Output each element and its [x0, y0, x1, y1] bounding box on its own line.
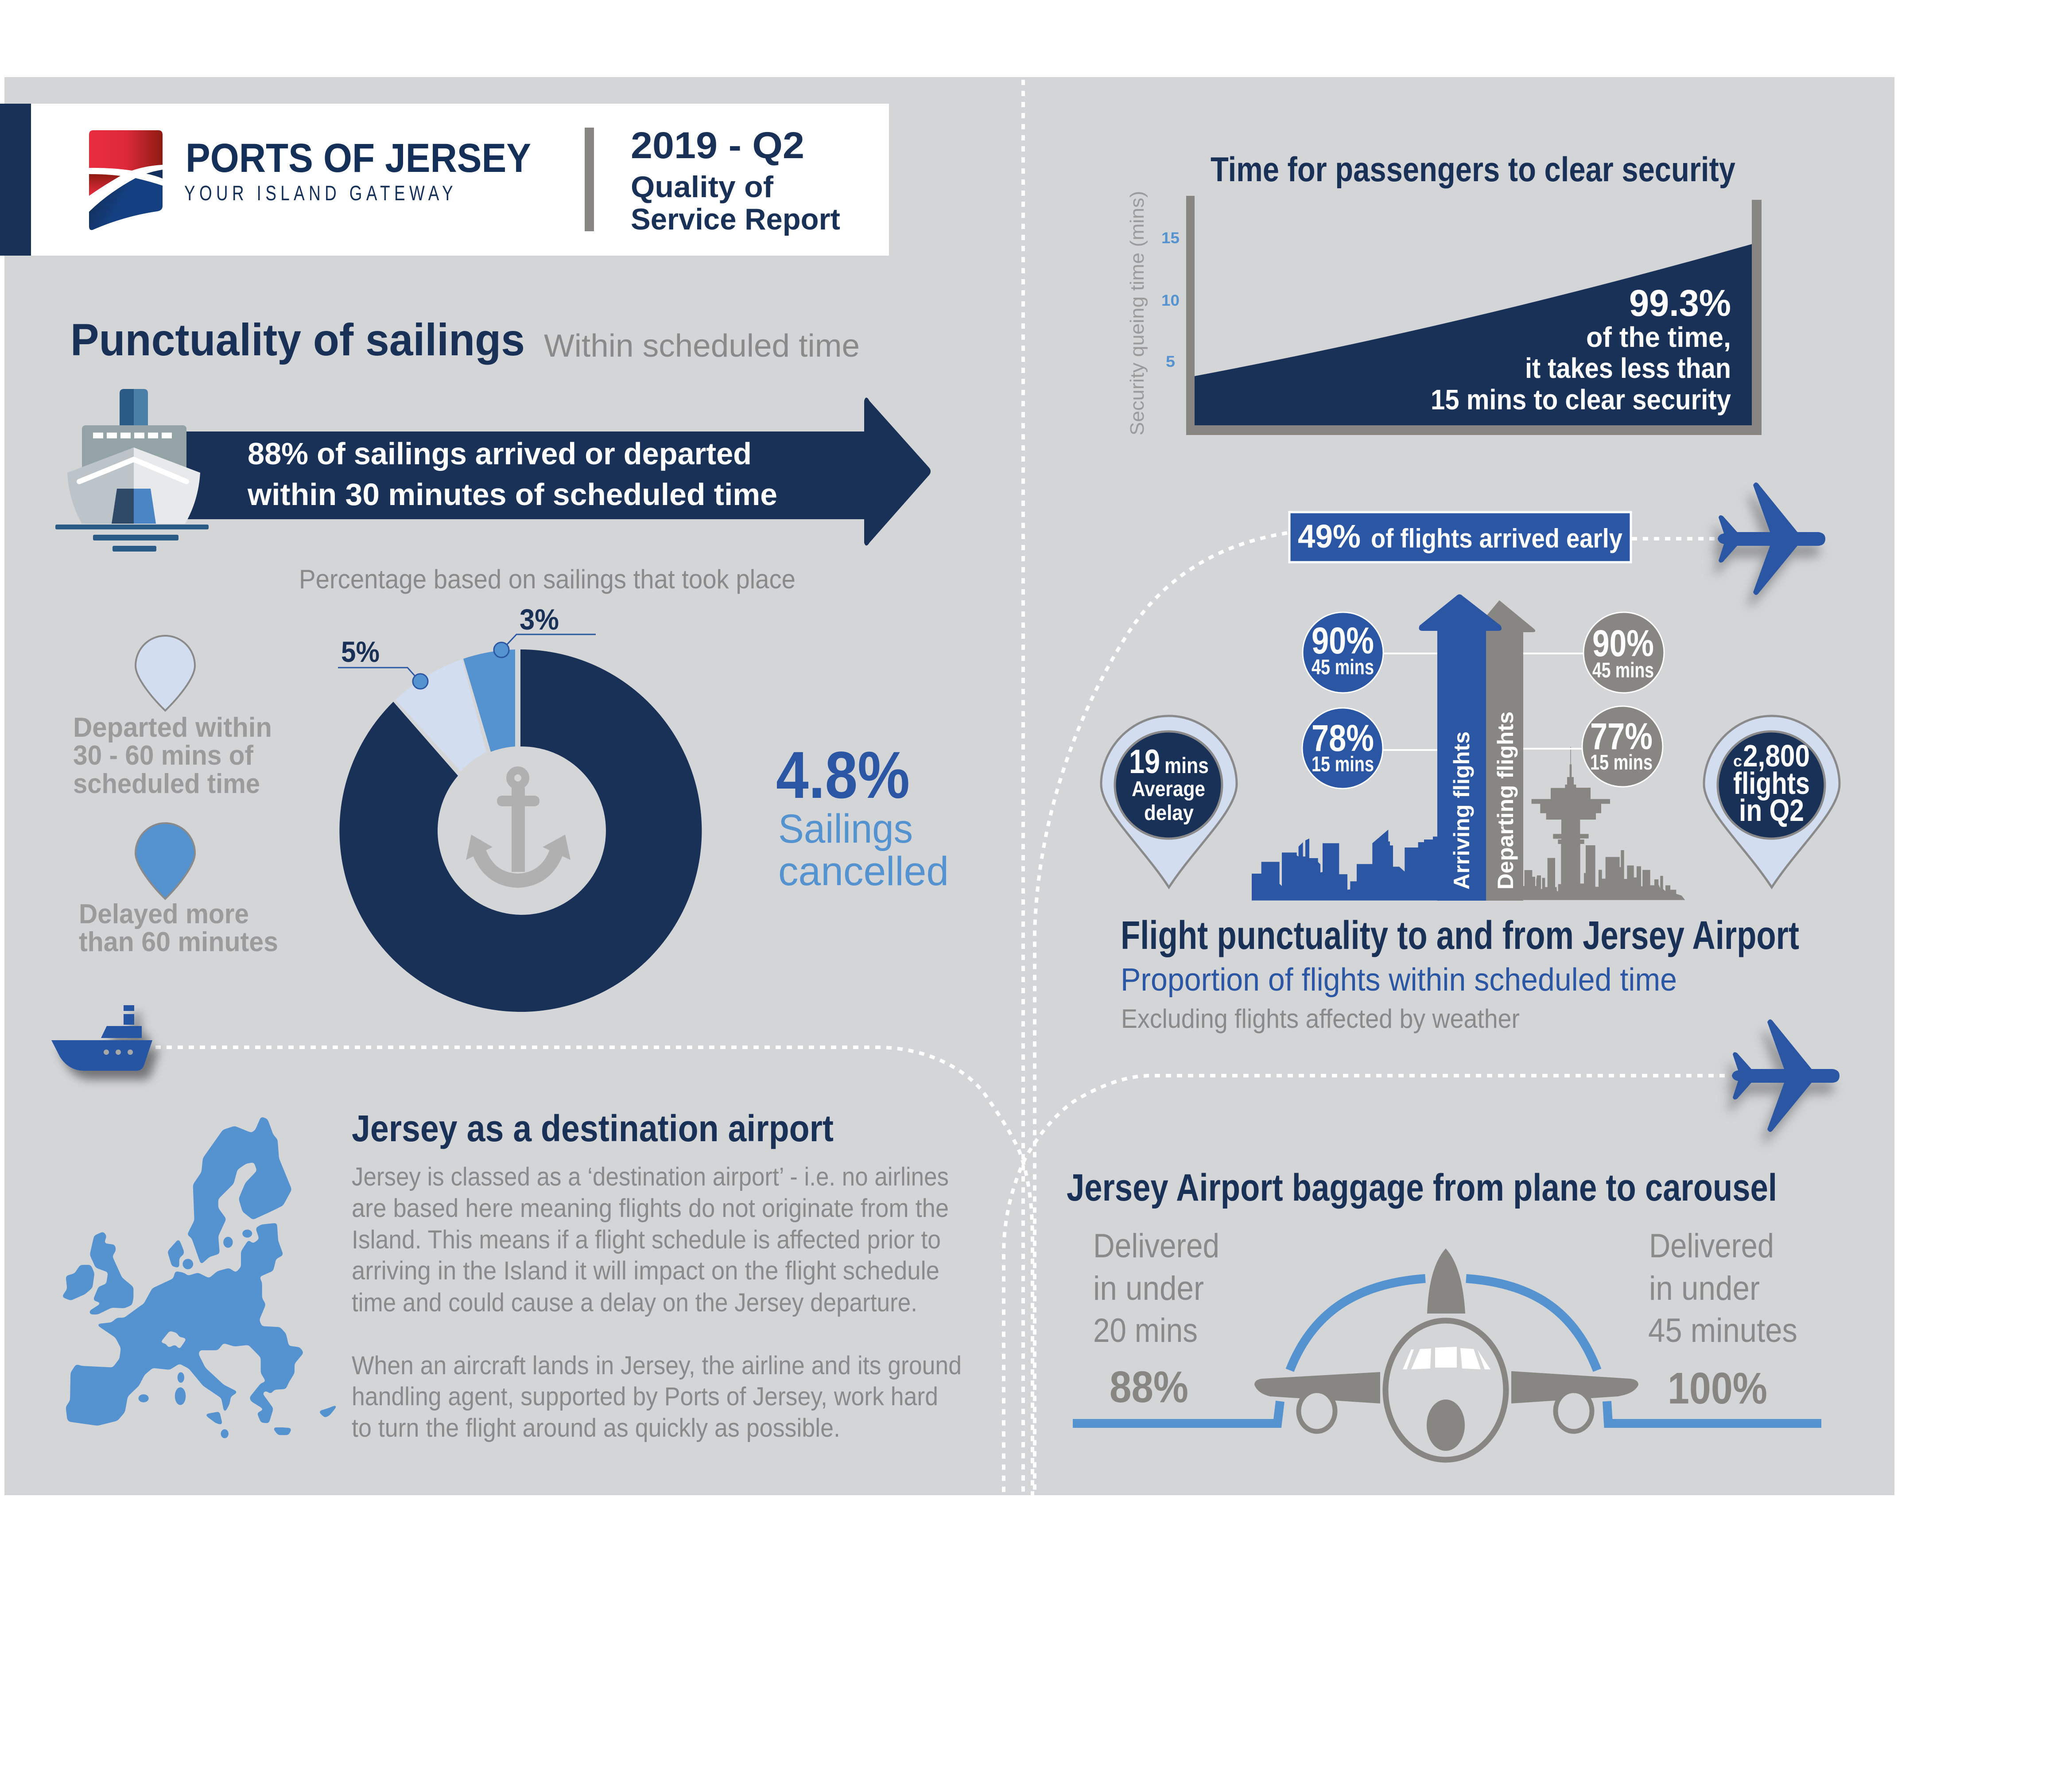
stat: 4.8% sailings cancelled: 4.8% — [776, 738, 910, 812]
heading: Jersey as a destination airport: Jersey as a destination airport — [352, 1108, 834, 1149]
y axis ticks — [1161, 229, 1180, 370]
text: delivered in under 45 minutes: 45 minutes — [1648, 1312, 1797, 1349]
skyline: departures and control tower — [1523, 747, 1685, 900]
report title: Quality of — [631, 170, 773, 204]
report title: Service Report — [631, 202, 840, 236]
bubble: departing 77% 15 mins: 15 mins — [1590, 751, 1653, 774]
skyline: arrivals — [1252, 830, 1437, 901]
donut chart: sailings — [338, 603, 702, 1012]
bubble: departing 77% 15 mins: 77% — [1590, 715, 1653, 757]
note: percentage basis: Percentage based on sailings that took place — [299, 564, 796, 594]
bubble: departing 77% 15 mins — [1523, 706, 1663, 787]
area chart: security queue time — [1126, 191, 1762, 435]
legend: departed within 30-60 mins: 30 - 60 mins of — [73, 740, 253, 771]
pin: c2,800 flights in Q2: 2,800 — [1743, 739, 1810, 773]
route line — [1073, 1279, 1821, 1423]
y axis ticks: 10 — [1161, 292, 1180, 309]
callout: 49% of flights arrived early: of flights arrived early — [1371, 524, 1623, 553]
text: delivered in under 45 minutes: Delivered — [1649, 1227, 1774, 1265]
text: delivered in under 20 mins: 20 mins — [1093, 1312, 1198, 1349]
bubble: arriving 78% 15 mins: 78% — [1312, 717, 1374, 759]
bubble: arriving 90% 45 mins: 45 mins — [1312, 656, 1374, 679]
icon: plane upper — [1718, 482, 1825, 595]
donut slice: on time — [339, 649, 702, 1012]
bubble: arriving 90% 45 mins — [1303, 612, 1437, 693]
pin: c2,800 flights in Q2 — [1704, 716, 1839, 887]
callout: 99.3% — [1431, 282, 1731, 416]
bubble: departing 90% 45 mins: 90% — [1592, 622, 1654, 664]
icon: ferry front view — [55, 389, 209, 552]
text block: destination airport: When an aircraft lands in Jersey, the airline and its ground — [352, 1351, 962, 1380]
pin: 19 mins average delay: 19 — [1129, 743, 1160, 781]
text block: destination airport: arriving in the Island it will impact on the flight schedule — [352, 1256, 939, 1285]
heading: punctuality of sailings: Punctuality of sailings — [70, 315, 525, 365]
report title — [631, 170, 840, 236]
text block: destination airport: Island. This means if a flight schedule is affected prior to — [352, 1225, 941, 1254]
pin: 19 mins average delay: delay — [1144, 801, 1194, 825]
icon: plane lower — [1732, 1019, 1839, 1132]
header band — [0, 104, 889, 256]
text block: destination airport: time and could cause a delay on the Jersey departure. — [352, 1288, 917, 1317]
bubble: departing 90% 45 mins: 45 mins — [1592, 659, 1654, 682]
note: excluding weather: Excluding flights affected by weather — [1121, 1004, 1520, 1034]
callout: 99.3%: 15 mins to clear security — [1431, 384, 1731, 416]
pin: c2,800 flights in Q2: in Q2 — [1739, 793, 1804, 828]
text block: destination airport: to turn the flight around as quickly as possible. — [352, 1414, 840, 1442]
icon: anchor — [466, 770, 570, 887]
callout: 49% of flights arrived early: 49% — [1298, 518, 1361, 555]
stat: 4.8% sailings cancelled — [776, 738, 949, 894]
pin: 19 mins average delay — [1101, 716, 1237, 887]
callout: 99.3%: 99.3% — [1629, 282, 1731, 324]
legend: delayed more than 60 mins — [79, 823, 278, 957]
callout: 99.3%: of the time, — [1586, 321, 1731, 353]
text block: destination airport: Jersey is classed as a ‘destination airport’ - i.e. no airlines — [352, 1162, 949, 1191]
pin: c2,800 flights in Q2: flights — [1733, 766, 1810, 801]
text block: destination airport: are based here meaning flights do not originate from the — [352, 1194, 949, 1223]
legend: departed within 30-60 mins: Departed within — [73, 712, 272, 743]
stat: 4.8% sailings cancelled: Sailings — [778, 806, 913, 851]
y axis ticks: 15 — [1161, 229, 1180, 247]
label: 5%: 5% — [341, 635, 380, 668]
subheading: proportion of flights: Proportion of flights within scheduled time — [1121, 962, 1677, 998]
pin: 19 mins average delay: mins — [1164, 753, 1209, 778]
text: delivered in under 45 minutes — [1648, 1227, 1797, 1349]
label: 3%: 3% — [520, 603, 559, 636]
heading: time to clear security: Time for passengers to clear security — [1211, 150, 1735, 189]
bubble: arriving 90% 45 mins: 90% — [1312, 620, 1374, 661]
heading: baggage: Jersey Airport baggage from plane to carousel — [1067, 1166, 1777, 1209]
logo wordmark: PORTS OF JERSEY — [186, 136, 531, 181]
bubble: arriving 78% 15 mins — [1302, 708, 1437, 789]
arrow: 88% of sailings: within 30 minutes of scheduled time — [247, 477, 777, 512]
map: Europe — [63, 1117, 337, 1438]
text: delivered in under 20 mins — [1093, 1227, 1219, 1349]
stat: 4.8% sailings cancelled: cancelled — [778, 849, 949, 894]
background panel — [4, 77, 1894, 1495]
text block: destination airport: handling agent, supported by Ports of Jersey, work hard — [352, 1382, 938, 1411]
dotted route lines — [155, 80, 1725, 1495]
bubble: arriving 78% 15 mins: 15 mins — [1312, 753, 1374, 776]
legend: delayed more than 60 mins: than 60 minutes — [79, 927, 278, 957]
text block: destination airport — [352, 1162, 962, 1442]
icon: plane front view — [1254, 1248, 1638, 1460]
report period: 2019 - Q2 — [631, 124, 804, 166]
logo: Ports of Jersey mark — [89, 130, 163, 230]
arrow: arriving flights: Arriving flights — [1449, 731, 1474, 890]
callout: 49% of flights arrived early — [1289, 512, 1631, 562]
arrow: arriving flights — [1419, 595, 1502, 901]
heading: flight punctuality: Flight punctuality to and from Jersey Airport — [1121, 913, 1799, 958]
label: 3% — [494, 603, 596, 657]
icon: small ship — [51, 1005, 152, 1071]
stat: 100%: 100% — [1668, 1364, 1767, 1413]
arrow: departing flights — [1473, 600, 1535, 901]
arrow: 88% of sailings — [177, 398, 931, 546]
legend: departed within 30-60 mins — [73, 636, 272, 799]
text: delivered in under 20 mins: in under — [1093, 1270, 1204, 1307]
label: 5% — [338, 635, 428, 689]
pin: c2,800 flights in Q2: c — [1733, 752, 1742, 770]
subheading: within scheduled time: Within scheduled time — [544, 328, 860, 364]
arrow: departing flights: Departing flights — [1493, 711, 1518, 890]
donut slice: 30-60 mins 5% — [396, 659, 486, 771]
text: delivered in under 45 minutes: in under — [1649, 1270, 1760, 1307]
text: delivered in under 20 mins: Delivered — [1093, 1227, 1219, 1265]
legend: delayed more than 60 mins: Delayed more — [79, 899, 249, 929]
y axis label: Security queing time (mins) — [1126, 191, 1148, 435]
bubble: departing 90% 45 mins — [1523, 612, 1664, 693]
logo strapline: YOUR ISLAND GATEWAY — [184, 181, 457, 205]
stat: 88%: 88% — [1110, 1362, 1188, 1412]
y axis ticks: 5 — [1166, 353, 1175, 370]
donut slice: over 60 mins 3% — [463, 649, 515, 752]
arrow: 88% of sailings: 88% of sailings arrived or departed — [248, 436, 752, 471]
pin: 19 mins average delay: Average — [1132, 777, 1205, 801]
legend: departed within 30-60 mins: scheduled time — [73, 769, 260, 799]
diagram: baggage route around plane — [1073, 1248, 1821, 1460]
callout: 99.3%: it takes less than — [1525, 352, 1731, 384]
